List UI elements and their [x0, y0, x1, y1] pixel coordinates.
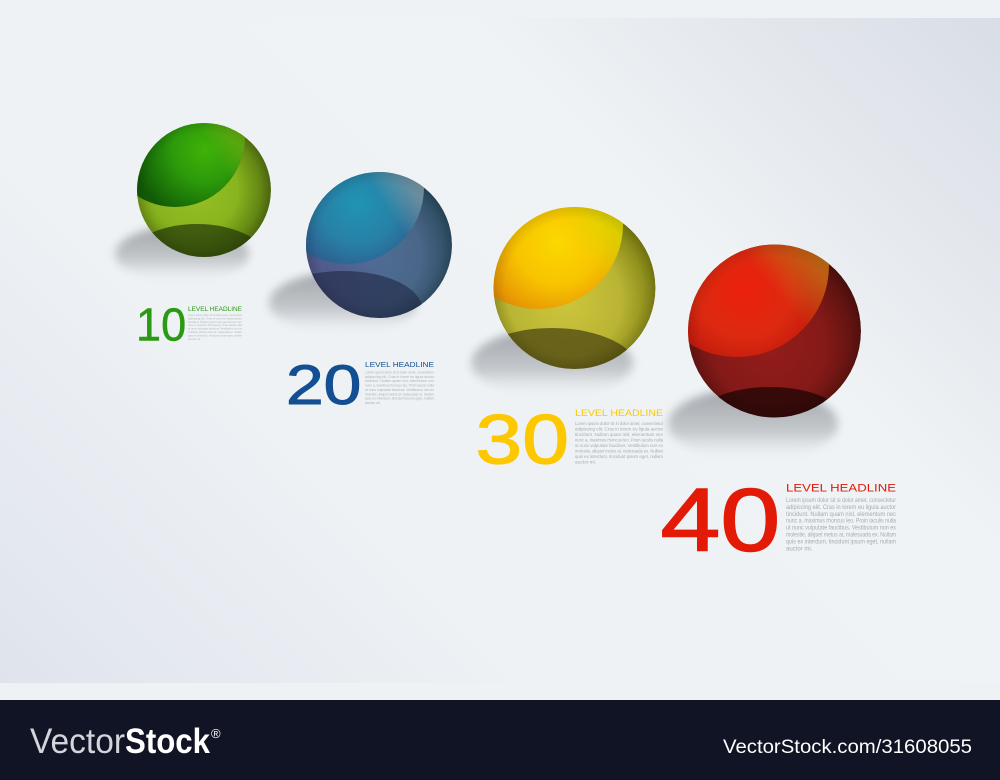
body text 40: Lorem ipsum dolor sit si dolor amet, consectetur — [786, 498, 896, 504]
body text 30: tincidunt. Nullam quam nisl, elementum nec — [575, 432, 664, 438]
body text 20: auctor mi. — [365, 401, 381, 405]
number 30: 30 — [476, 401, 569, 479]
sphere: green — [137, 123, 271, 257]
body text 40: adipiscing elit. Cras in lorem eu ligula auctor — [786, 505, 896, 511]
shadow: red sphere — [668, 388, 838, 460]
body text 20: adipiscing elit. Cras in lorem eu ligula auctor — [365, 375, 435, 379]
body text 20: Lorem ipsum dolor sit si dolor amet, consectetur — [365, 370, 435, 374]
body text 30: adipiscing elit. Cras in lorem eu ligula auctor — [575, 426, 663, 432]
body text 10: tincidunt. Nullam quam nisl, elementum nec — [188, 320, 242, 324]
sphere: red — [688, 244, 861, 418]
body text 40: molestie, aliquet metus at, malesuada ex. Nullam — [786, 532, 896, 538]
number 40: 40 — [660, 470, 780, 569]
VectorStock logo: Stock — [125, 722, 210, 761]
body text 10: nunc a, maximus rhoncus leo. Proin iaculis nulla — [188, 323, 242, 327]
VectorStock logo: ® — [211, 726, 221, 741]
body text 10: molestie, aliquet metus at, malesuada ex. Nullam — [188, 330, 242, 334]
body text 30: molestie, aliquet metus at, malesuada ex. Nullam — [575, 448, 663, 454]
level 40 block — [660, 470, 897, 569]
body text 30 — [575, 421, 664, 466]
body text 40: auctor mi. — [786, 546, 813, 552]
shadow: green sphere — [115, 226, 249, 282]
level 30 block — [476, 401, 664, 479]
level 10 block — [136, 299, 242, 351]
body text 10: Lorem ipsum dolor sit si dolor amet, consectetur — [188, 313, 242, 317]
level 20 block — [286, 354, 435, 417]
VectorStock logo: Vector — [30, 722, 125, 761]
number 20: 20 — [286, 354, 361, 417]
body text 20: nunc a, maximus rhoncus leo. Proin iaculis nulla — [365, 384, 435, 388]
headline 20: LEVEL HEADLINE — [365, 360, 434, 369]
shadow: yellow sphere — [471, 329, 633, 397]
body text 10: adipiscing elit. Cras in lorem eu ligula auctor — [188, 316, 242, 320]
number 10: 10 — [136, 299, 186, 351]
body text 20: tincidunt. Nullam quam nisl, elementum nec — [365, 379, 434, 383]
body text 30: ut nunc vulputate faucibus. Vestibulum non ex — [575, 443, 664, 449]
body text 20: ut nunc vulputate faucibus. Vestibulum non ex — [365, 388, 434, 392]
sphere: blue — [306, 172, 452, 318]
shadow: blue sphere — [269, 272, 417, 334]
body text 10: auctor mi. — [188, 337, 201, 341]
body text 10: quis ex interdum, tincidunt ipsum eget, nullam — [188, 333, 242, 337]
image id text: VectorStock.com/31608055 — [723, 736, 972, 758]
body text 30: quis ex interdum, tincidunt ipsum eget, nullam — [575, 454, 663, 460]
body text 40: nunc a, maximus rhoncus leo. Proin iaculis nulla — [786, 519, 897, 525]
headline 40: LEVEL HEADLINE — [786, 482, 896, 494]
headline 30: LEVEL HEADLINE — [575, 407, 663, 418]
body text 20: quis ex interdum, tincidunt ipsum eget, nullam — [365, 397, 434, 401]
body text 10 — [188, 313, 242, 341]
body text 40: ut nunc vulputate faucibus. Vestibulum non ex — [786, 526, 896, 532]
body text 30: nunc a, maximus rhoncus leo. Proin iaculis nulla — [575, 438, 663, 444]
footer bar — [0, 700, 1000, 780]
body text 40: tincidunt. Nullam quam nisl, elementum nec — [786, 512, 896, 518]
body text 30: Lorem ipsum dolor sit si dolor amet, consectetur — [575, 421, 663, 427]
body text 40: quis ex interdum, tincidunt ipsum eget, nullam — [786, 539, 896, 545]
body text 30: auctor mi. — [575, 460, 596, 466]
body text 10: ut nunc vulputate faucibus. Vestibulum non ex — [188, 327, 242, 331]
body text 40 — [786, 498, 897, 552]
sphere: yellow — [494, 207, 656, 369]
body text 20: molestie, aliquet metus at, malesuada ex. Nullam — [365, 392, 434, 396]
body text 20 — [365, 370, 435, 405]
headline 10: LEVEL HEADLINE — [188, 307, 242, 313]
VectorStock logo — [30, 722, 221, 761]
